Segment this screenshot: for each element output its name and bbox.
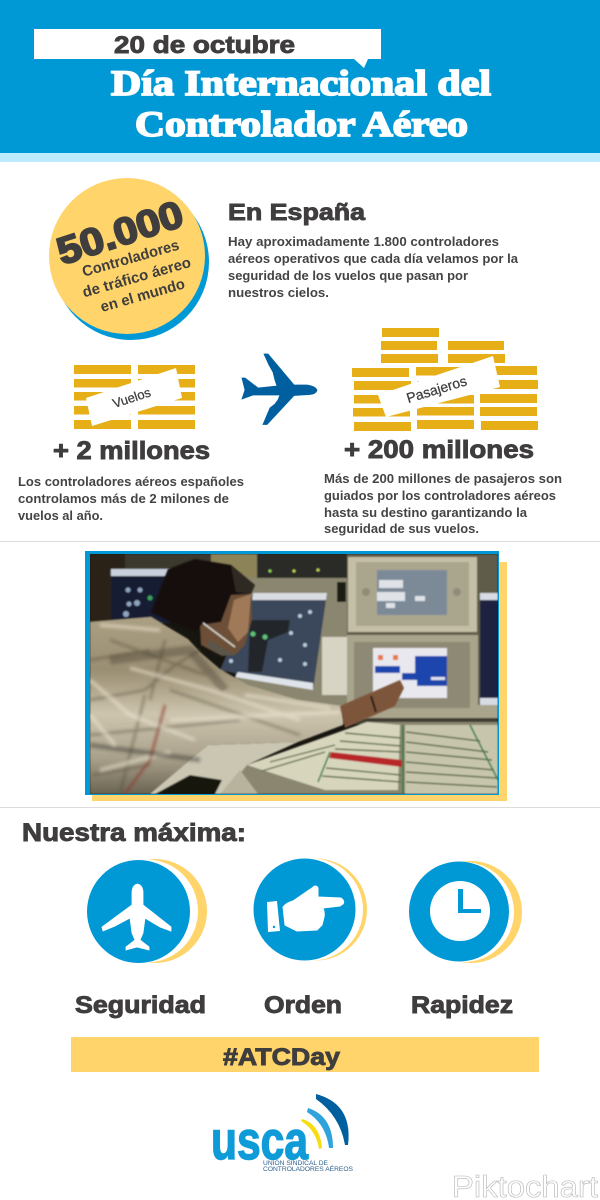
title bbox=[111, 63, 491, 144]
label: Rapidez: Rapidez bbox=[411, 992, 513, 1019]
passengers paragraph: seguridad de sus vuelos. bbox=[324, 521, 479, 536]
title: Controlador Aéreo bbox=[135, 104, 468, 144]
flights paragraph: Los controladores aéreos españoles bbox=[18, 474, 244, 489]
logo: USCA: UNIÓN SINDICAL DE bbox=[263, 1158, 329, 1167]
icon: clock circle bbox=[409, 861, 522, 963]
photo: air traffic controller at console bbox=[85, 551, 507, 801]
En España heading: En España bbox=[228, 199, 365, 225]
title: Día Internacional del bbox=[111, 63, 491, 103]
passengers paragraph: Más de 200 millones de pasajeros son bbox=[324, 471, 562, 486]
heading: Nuestra máxima: Nuestra máxima: bbox=[22, 819, 246, 847]
En España paragraph: aéreos operativos que cada día velamos por la bbox=[228, 251, 519, 266]
flights paragraph: controlamos más de 2 milones de bbox=[18, 491, 229, 506]
badge: 50.000 controllers: en el mundo bbox=[99, 276, 187, 316]
passengers paragraph: guiados por los controladores aéreos bbox=[324, 488, 556, 503]
badge: 50.000 controllers bbox=[49, 178, 209, 340]
flights paragraph bbox=[18, 474, 244, 523]
label: Seguridad: Seguridad bbox=[75, 992, 206, 1019]
icon: plane circle bbox=[87, 859, 207, 963]
icon: passengers bars with label bbox=[352, 328, 538, 431]
badge: 50.000 controllers: Controladores bbox=[80, 237, 181, 281]
hashtag bar bbox=[71, 1037, 539, 1072]
stat: + 200 millones: + 200 millones bbox=[344, 436, 534, 464]
hashtag bar: #ATCDay bbox=[223, 1044, 341, 1071]
icon: pointing hand circle bbox=[254, 858, 367, 960]
header banner bbox=[0, 0, 600, 162]
icon: passengers bars with label: Pasajeros bbox=[404, 372, 469, 406]
label: Orden: Orden bbox=[264, 992, 342, 1019]
stat: + 2 millones: + 2 millones bbox=[53, 437, 210, 465]
date speech bubble bbox=[34, 29, 381, 68]
flights paragraph: vuelos al año. bbox=[18, 508, 103, 523]
photo: shirt plaid folds bbox=[90, 625, 340, 794]
icon: blue airplane bbox=[242, 354, 317, 424]
passengers paragraph: hasta su destino garantizando la bbox=[324, 505, 528, 520]
En España paragraph: seguridad de los vuelos que pasan por bbox=[228, 268, 468, 283]
logo: USCA bbox=[211, 1094, 354, 1173]
badge: 50.000 controllers: 50.000 bbox=[52, 194, 189, 274]
En España paragraph: Hay aproximadamente 1.800 controladores bbox=[228, 234, 499, 249]
En España paragraph bbox=[228, 234, 519, 300]
En España paragraph: nuestros cielos. bbox=[228, 285, 329, 300]
date speech bubble: 20 de octubre bbox=[114, 32, 295, 59]
logo: USCA: CONTROLADORES AÉREOS bbox=[263, 1164, 354, 1173]
badge: 50.000 controllers: de tráfico áereo bbox=[81, 254, 193, 301]
icon: flights bars with label bbox=[74, 365, 195, 429]
passengers paragraph bbox=[324, 471, 562, 536]
icon: flights bars with label: Vuelos bbox=[111, 384, 153, 411]
logo: USCA: usca bbox=[211, 1111, 309, 1171]
